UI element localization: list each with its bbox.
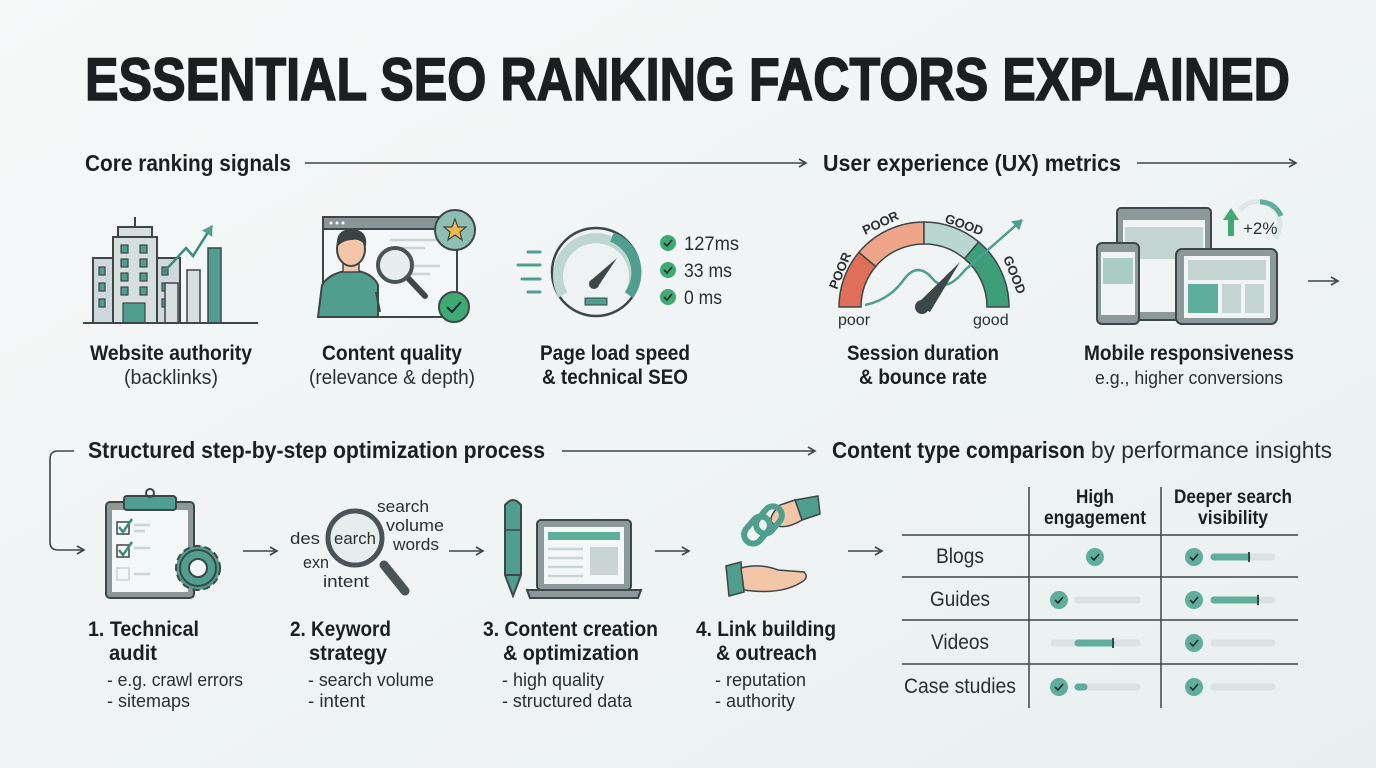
icon: clipboard with gear [106,489,220,598]
step 3 label: 3. Content creation [483,618,658,641]
step 2 label: - intent [308,691,365,711]
step 4 label: 4. Link building [696,618,836,641]
check marks [1050,548,1203,696]
label: mobile responsiveness: Mobile responsiveness [1084,342,1294,365]
icon: speedometer with timings [518,228,739,316]
heading: content type comparison: Content type comparison [832,437,1085,463]
arrow: step 2 to 3 [449,550,483,552]
icon: session gauge: GOOD [1000,254,1029,296]
icon: keyword magnifier: des [290,529,320,548]
step 4 label: - reputation [715,670,806,690]
icon: session gauge: POOR [826,249,854,291]
icon: content quality person with magnifier [318,210,475,322]
icon: speedometer with timings: 0 ms [684,288,722,309]
bar fills [1078,557,1256,687]
bar tracks [1054,557,1272,687]
step 2 label: - search volume [308,670,434,690]
step 3 label: - structured data [502,691,633,711]
icon: building with growth bars [83,217,258,323]
icon: keyword magnifier: earch [334,529,376,548]
icon: keyword magnifier: exn [303,553,329,572]
table header: Deeper search [1174,487,1292,508]
icon: keyword magnifier: volume [386,516,444,535]
step 2 label: 2. Keyword [290,618,391,641]
step 1 label: - e.g. crawl errors [107,670,243,690]
icon: session gauge: POOR [860,208,902,238]
label: website authority [90,342,252,389]
step 3 label: & optimization [503,642,639,665]
step 1 label: - sitemaps [107,691,190,711]
step 4 label: - authority [715,691,795,711]
heading: structured optimization process: Structured step-by-step optimization process [88,437,545,463]
table row labels: Case studies [904,675,1016,698]
arrow: step 4 to table [848,550,882,552]
heading: content type comparison: by performance insights [1091,437,1332,463]
label: session duration: & bounce rate [859,366,987,389]
label: session duration: Session duration [847,342,999,365]
label: mobile responsiveness: e.g., higher conversions [1095,368,1283,388]
comparison table [902,487,1298,708]
table header: engagement [1044,508,1147,529]
icon: session gauge: GOOD [943,211,985,238]
icon: keyword magnifier: intent [323,572,369,591]
arrow: bracket into step 1 [50,451,84,550]
label: session duration [847,342,999,389]
icon: devices [1097,202,1281,324]
step 4 label: & outreach [716,642,817,665]
step 4 label [696,618,836,711]
icon: keyword magnifier: search [377,497,429,516]
label: content quality: Content quality [322,342,462,365]
icon: keyword magnifier [290,497,444,591]
table row labels [904,545,1016,698]
table header [1044,487,1292,529]
table row labels: Videos [931,631,989,654]
step 2 label [290,618,434,711]
icon: pen and laptop [505,500,641,598]
table header: High [1076,487,1114,508]
arrow: row 1 continuation [1308,280,1338,282]
label: page load speed: Page load speed [540,342,690,365]
icon: speedometer with timings: 127ms [684,234,739,255]
step 3 label: - high quality [502,670,604,690]
heading: user experience metrics: User experience (UX) metrics [823,150,1121,176]
heading: content type comparison [832,437,1332,463]
step 1 label: 1. Technical [88,618,199,641]
arrow: step 1 to 2 [243,550,277,552]
heading: core ranking signals: Core ranking signals [85,150,291,176]
table header: visibility [1198,508,1268,529]
label: mobile responsiveness [1084,342,1294,388]
table row labels: Guides [930,588,990,611]
icon: session gauge [826,208,1029,329]
step 1 label: audit [109,642,157,665]
icon: keyword magnifier: words [392,535,439,554]
label: content quality: (relevance & depth) [309,367,475,389]
step 1 label [88,618,243,711]
icon: speedometer with timings: 33 ms [684,261,732,282]
arrow: step 3 to 4 [655,550,689,552]
icon: session gauge: poor [838,312,871,329]
icon: session gauge: good [973,312,1009,329]
label: content quality [309,342,475,389]
label: website authority: Website authority [90,342,252,365]
table row labels: Blogs [936,545,984,568]
step 3 label [483,618,658,711]
icon: devices: +2% [1243,219,1278,238]
icon: hands with chain link [726,496,820,596]
step 2 label: strategy [309,642,387,665]
label: page load speed: & technical SEO [542,366,688,389]
label: page load speed [540,342,690,389]
label: website authority: (backlinks) [124,367,218,389]
